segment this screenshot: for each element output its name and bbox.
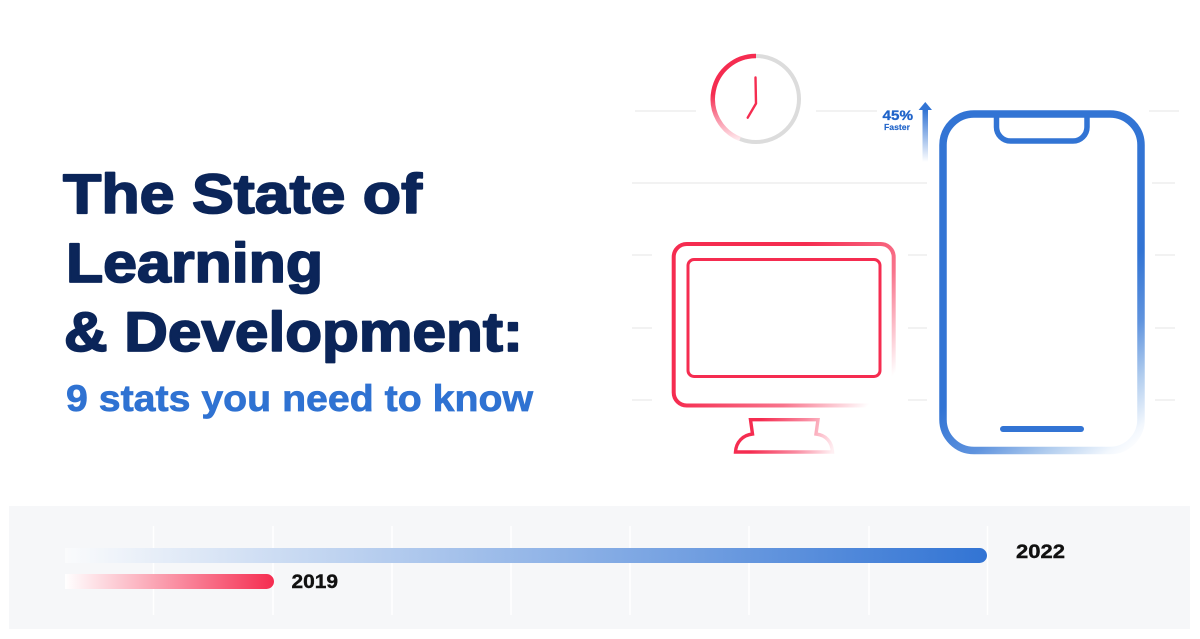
bar: 2019 bbox=[65, 574, 274, 589]
callout: 45% faster bbox=[882, 107, 914, 132]
arrow: upward bbox=[919, 102, 932, 162]
bar: 2022 bbox=[65, 548, 987, 563]
callout: 45% faster: Faster bbox=[884, 122, 911, 132]
title: The State of bbox=[63, 162, 422, 225]
icon: smartphone bbox=[943, 114, 1141, 450]
title: Learning bbox=[66, 231, 323, 294]
icon: clock bbox=[713, 56, 799, 142]
callout: 45% faster: 45% bbox=[882, 107, 914, 123]
icon: desktop monitor bbox=[674, 244, 894, 452]
label: 2022: 2022 bbox=[1016, 541, 1065, 563]
background grid lines bbox=[632, 111, 1179, 400]
label: 2019: 2019 bbox=[292, 571, 338, 593]
subtitle: 9 stats you need to know bbox=[66, 378, 533, 419]
title bbox=[63, 162, 523, 363]
title: & Development: bbox=[64, 300, 523, 363]
panel: timeline comparison bbox=[9, 506, 1190, 629]
